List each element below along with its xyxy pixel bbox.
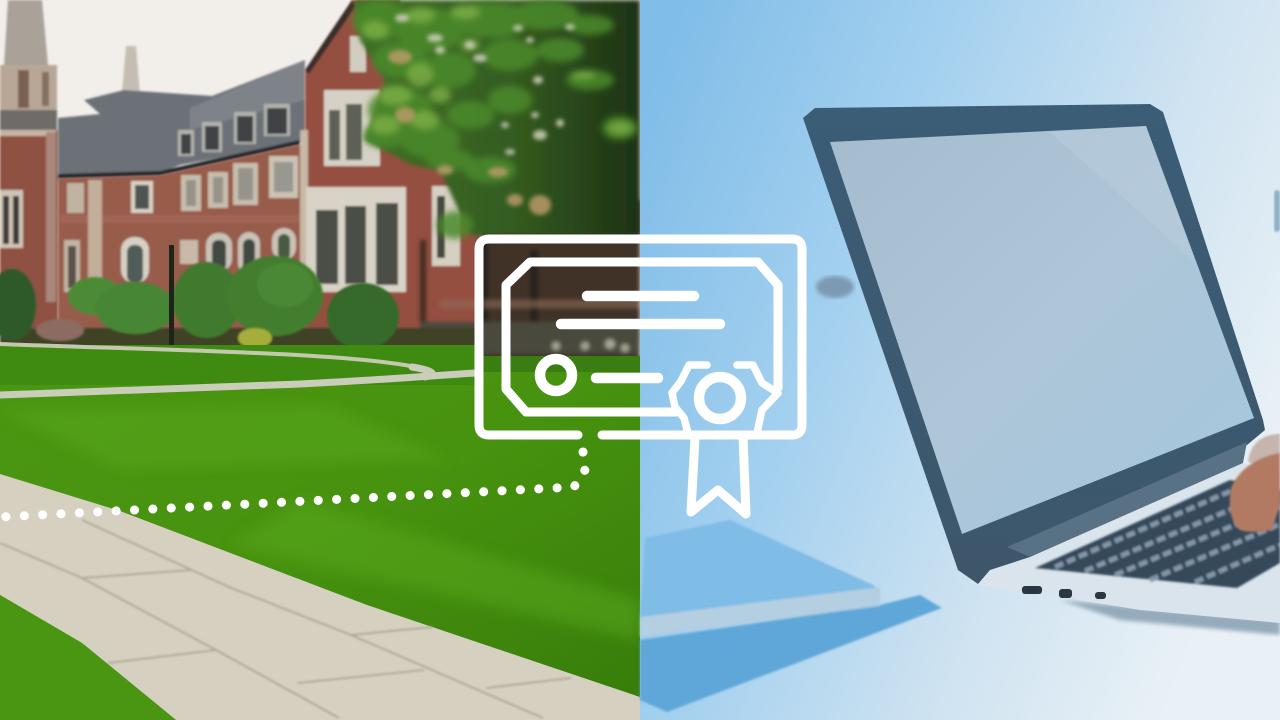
building: slate roof <box>58 46 305 179</box>
certificate outer frame <box>479 239 802 435</box>
keyboard <box>1035 480 1280 588</box>
text lines <box>587 291 694 301</box>
certificate inner frame <box>506 262 778 412</box>
hinge band <box>1007 442 1247 557</box>
hedges <box>0 256 480 352</box>
bottom-left grass <box>0 595 176 720</box>
icon: certificate with ribbon <box>0 239 802 517</box>
sidewalk <box>0 474 640 720</box>
laptop lid <box>803 104 1265 584</box>
building: left tower <box>0 0 58 330</box>
sky <box>0 0 640 340</box>
small seal <box>540 359 572 391</box>
curved path <box>0 344 475 395</box>
ports <box>1022 586 1106 599</box>
rosette <box>672 365 778 433</box>
laptop shadow <box>1060 600 1280 635</box>
dark grounds behind tree <box>420 200 640 370</box>
dotted trail <box>0 452 585 517</box>
right edge object <box>1274 190 1280 232</box>
laptop <box>803 104 1280 635</box>
tree <box>352 0 640 239</box>
hand on keyboard <box>1230 434 1280 532</box>
blue background <box>640 0 1280 720</box>
panel: online learning photo <box>640 0 1280 720</box>
ribbon <box>691 437 746 514</box>
lawn <box>0 345 640 720</box>
blurred object <box>816 276 854 298</box>
building: brick walls and windows <box>58 0 480 350</box>
panel: campus photo <box>0 0 640 720</box>
laptop screen <box>830 126 1254 534</box>
lamp post <box>169 245 174 392</box>
laptop base <box>970 463 1280 623</box>
notebook on desk <box>640 520 942 712</box>
